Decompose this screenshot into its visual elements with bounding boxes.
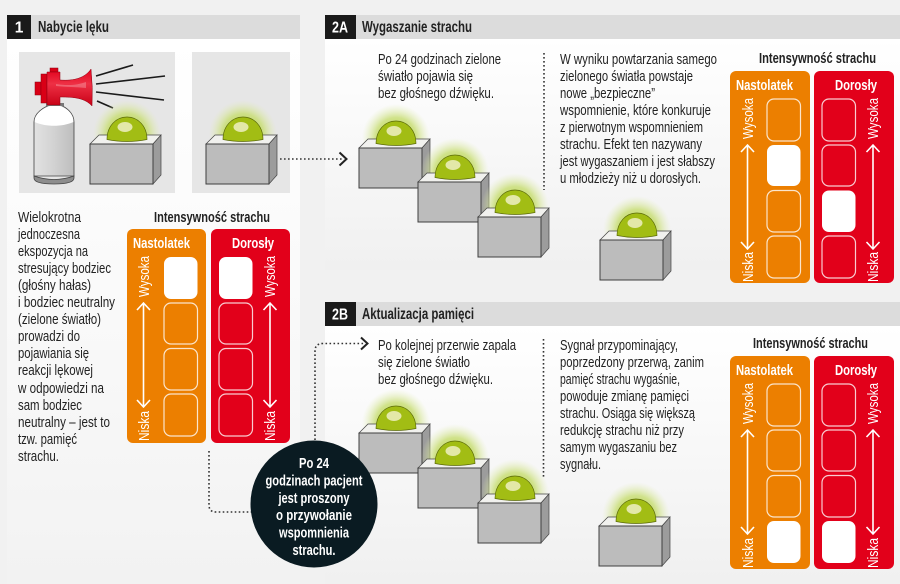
text: explanation: zielonego światła powstaje bbox=[560, 69, 693, 85]
callout: patient recall: godzinach pacjent bbox=[266, 474, 363, 490]
callout: patient recall: o przywołanie bbox=[276, 508, 352, 524]
text: intro: Po 24 godzinach zielone bbox=[378, 52, 501, 68]
panel: Dorosły bbox=[814, 71, 894, 283]
text: intro: bez głośnego dźwięku. bbox=[378, 372, 493, 388]
text: description: (zielone światło) bbox=[18, 312, 101, 328]
text: explanation: pamięć strachu wygaśnie, bbox=[560, 372, 680, 388]
text: explanation: jest wygaszaniem i jest słabszy bbox=[559, 154, 716, 170]
panel: Nastolatek: Wysoka bbox=[137, 255, 153, 297]
heading: 2B Aktualizacja pamięci: 2B bbox=[332, 306, 348, 324]
panel: Dorosły: Wysoka bbox=[866, 97, 882, 139]
text: description: ekspozycja na bbox=[18, 244, 89, 260]
panel: Nastolatek: Wysoka bbox=[741, 97, 757, 139]
panel: 1 Nabycie lęku bbox=[7, 15, 300, 584]
callout: patient recall: jest proszony bbox=[278, 491, 350, 507]
text: description: i bodziec neutralny bbox=[18, 295, 116, 311]
text: explanation: nowe „bezpieczne” bbox=[560, 86, 655, 102]
text: description: tzw. pamięć bbox=[18, 432, 77, 448]
text: explanation: strachu. Osiąga się większą bbox=[560, 406, 696, 422]
text: description: strachu. bbox=[18, 449, 59, 465]
text: description: reakcji lękowej bbox=[18, 363, 93, 379]
icon: green light button bbox=[599, 482, 670, 566]
panel: Nastolatek bbox=[730, 356, 810, 569]
text: description: Wielokrotna bbox=[18, 210, 82, 226]
panel: Dorosły: Wysoka bbox=[866, 382, 882, 424]
text: description: prowadzi do bbox=[18, 329, 80, 345]
text: explanation: u młodzieży niż u dorosłych. bbox=[560, 171, 701, 187]
chart: fear intensity, stage 2B bbox=[730, 336, 894, 569]
divider: 2A text columns bbox=[543, 53, 545, 190]
divider: 2B text columns bbox=[542, 339, 544, 477]
illustration: horn and green light bbox=[19, 52, 175, 193]
panel: 2B Aktualizacja pamięci bbox=[325, 302, 900, 584]
icon: green light button bbox=[600, 196, 671, 280]
panel: Dorosły: Dorosły bbox=[232, 236, 274, 252]
text: explanation: sygnału. bbox=[560, 457, 601, 473]
text: description: w odpowiedzi na bbox=[17, 381, 105, 397]
arrow: patient recall to 2B bbox=[315, 338, 368, 440]
text: explanation: W wyniku powtarzania samego bbox=[560, 52, 717, 68]
panel: Dorosły: Niska bbox=[866, 537, 882, 568]
icon: green light button bbox=[90, 100, 161, 184]
text: description: jednoczesna bbox=[17, 227, 81, 243]
text: explanation: samym wygaszaniu bez bbox=[560, 440, 677, 456]
chart: fear intensity, stage 1: Intensywność strachu bbox=[154, 210, 270, 226]
panel: Nastolatek: Niska bbox=[741, 251, 757, 282]
text: intro: się zielone światło bbox=[378, 355, 470, 371]
arrow: stage 1 to patient recall bbox=[209, 451, 254, 512]
heading: 2B Aktualizacja pamięci: Aktualizacja pamięci bbox=[362, 306, 474, 323]
panel: Nastolatek: Niska bbox=[137, 410, 153, 441]
callout: patient recall: strachu. bbox=[292, 543, 336, 559]
heading: 1 Nabycie lęku bbox=[7, 15, 300, 39]
text: description: (głośny hałas) bbox=[18, 278, 91, 294]
text: intro: Po kolejnej przerwie zapala bbox=[378, 338, 517, 354]
icon: three green lights bbox=[359, 389, 549, 543]
panel: 2A Wygaszanie strachu bbox=[325, 15, 900, 283]
panel: Dorosły bbox=[211, 229, 290, 443]
panel: Dorosły: Niska bbox=[866, 251, 882, 282]
callout: patient recall: Po 24 bbox=[299, 456, 329, 472]
icon: green light button bbox=[206, 100, 277, 184]
text: intro: światło pojawia się bbox=[378, 69, 473, 85]
panel: Dorosły: Wysoka bbox=[263, 255, 279, 297]
text: description: sam bodziec bbox=[18, 398, 82, 414]
text: description: neutralny – jest to bbox=[18, 415, 110, 431]
heading: 2B Aktualizacja pamięci bbox=[325, 302, 900, 326]
panel: Nastolatek bbox=[730, 71, 810, 283]
icon: three green lights bbox=[359, 104, 549, 257]
arrow: stage 1 to 2A bbox=[280, 152, 346, 166]
icon: air horn can bbox=[34, 68, 92, 184]
callout: patient recall bbox=[250, 440, 378, 568]
text: description: pojawiania się bbox=[18, 346, 89, 362]
panel: Nastolatek: Nastolatek bbox=[133, 236, 191, 252]
panel: Nastolatek bbox=[127, 229, 206, 443]
text: explanation: poprzedzony przerwą, zanim bbox=[560, 355, 704, 371]
panel: Dorosły bbox=[814, 356, 894, 569]
icon: sound lines bbox=[96, 65, 165, 108]
heading: 2A Wygaszanie strachu: 2A bbox=[332, 20, 348, 36]
callout: patient recall: wspomnienia bbox=[278, 526, 350, 542]
illustration: green light alone bbox=[192, 52, 290, 193]
panel: Dorosły: Niska bbox=[263, 410, 279, 441]
heading: 1 Nabycie lęku: Nabycie lęku bbox=[38, 19, 109, 36]
heading: 2A Wygaszanie strachu: Wygaszanie strachu bbox=[362, 19, 472, 36]
panel: Nastolatek: Niska bbox=[741, 537, 757, 568]
heading: 1 Nabycie lęku: 1 bbox=[15, 20, 24, 36]
text: explanation: Sygnał przypominający, bbox=[560, 338, 678, 354]
text: explanation: strachu. Efekt ten nazywany bbox=[560, 137, 703, 153]
chart: fear intensity, stage 1 bbox=[127, 210, 290, 443]
text: intro: bez głośnego dźwięku. bbox=[378, 86, 494, 102]
text: explanation: redukcję strachu niż przy bbox=[560, 423, 685, 439]
panel: Dorosły: Dorosły bbox=[835, 363, 877, 379]
panel: Dorosły: Dorosły bbox=[835, 78, 877, 94]
text: explanation: wspomnienie, które konkuruje bbox=[559, 103, 711, 119]
text: explanation: powoduje zmianę pamięci bbox=[560, 389, 689, 405]
text: description: stresujący bodziec bbox=[18, 261, 111, 277]
panel: Nastolatek: Nastolatek bbox=[736, 78, 794, 94]
heading: 2A Wygaszanie strachu bbox=[325, 15, 900, 39]
text: explanation: z pierwotnym wspomnieniem bbox=[560, 120, 703, 136]
chart: fear intensity, stage 2A bbox=[730, 51, 894, 283]
panel: Nastolatek: Wysoka bbox=[741, 382, 757, 424]
panel: Nastolatek: Nastolatek bbox=[736, 363, 794, 379]
